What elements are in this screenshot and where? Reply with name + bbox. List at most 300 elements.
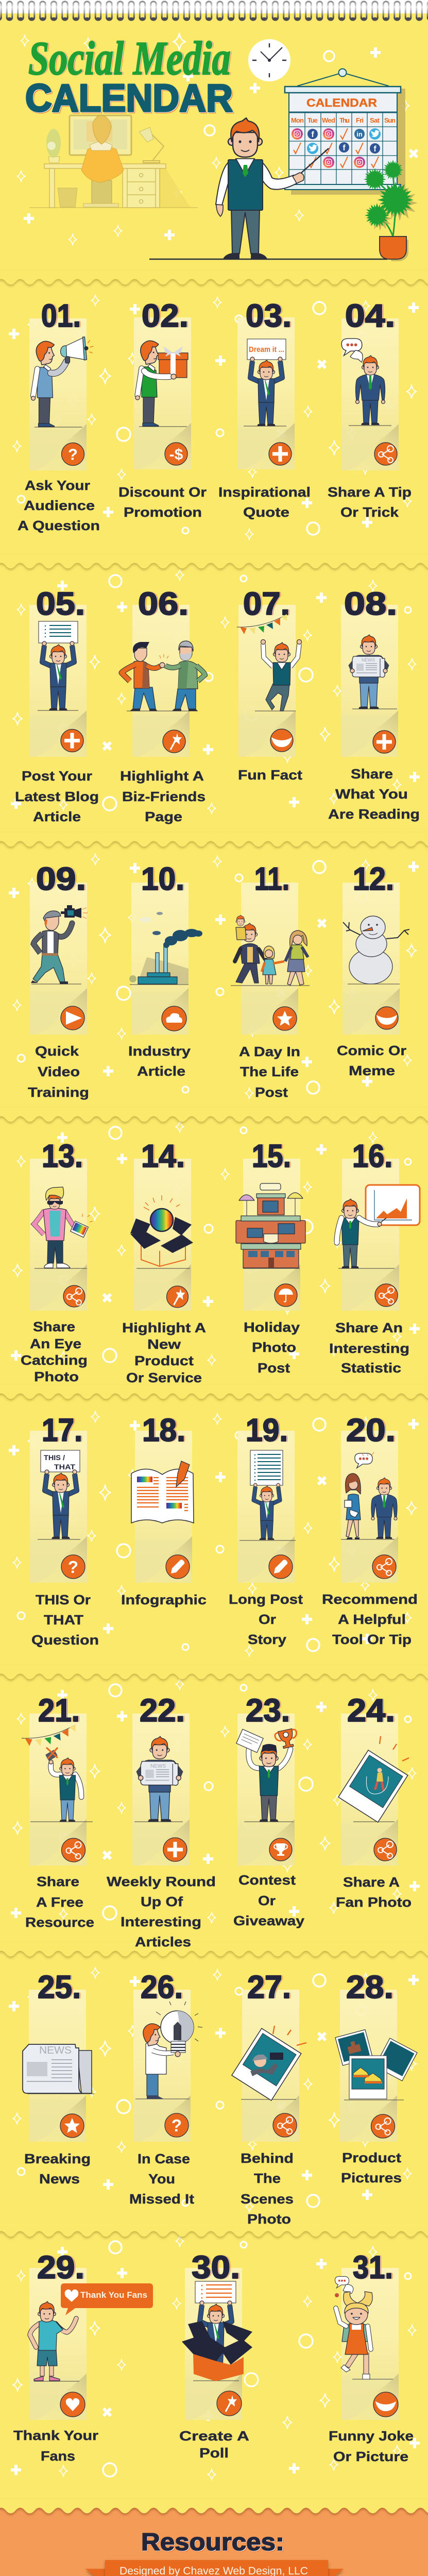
illustration: man with long post sign [239, 1450, 296, 1540]
footer wavy top [0, 2499, 428, 2513]
speech bubble [61, 2283, 153, 2315]
label: Share A [343, 1874, 400, 1890]
item 07 [237, 586, 302, 783]
label [341, 2150, 402, 2185]
icon: pencil [269, 1555, 293, 1579]
illustration: newspaper [23, 2044, 94, 2094]
label [28, 1043, 89, 1100]
item 10 [128, 861, 202, 1079]
note paper [341, 1431, 398, 1583]
label: A Question [18, 518, 100, 533]
title: CALENDAR [25, 76, 233, 120]
calendar heading: CALENDAR [306, 96, 377, 109]
label: Recommend [322, 1591, 418, 1607]
illustration: open box with rainbow ball [130, 1195, 193, 1268]
item 14 [122, 1139, 206, 1385]
illustration: fashion woman with tablet [34, 1187, 93, 1268]
icon: smile [375, 1007, 398, 1029]
number: 13. [42, 1139, 83, 1174]
label: Industry [128, 1043, 191, 1059]
number: 01. [41, 298, 81, 334]
note paper [342, 1159, 399, 1311]
ribbon banner [85, 2560, 344, 2576]
desk scene background illustration [29, 115, 198, 208]
note paper [134, 1159, 191, 1311]
note paper [237, 1431, 295, 1583]
icon: wand [163, 730, 185, 753]
icon: share [374, 1838, 397, 1861]
label [24, 2151, 91, 2187]
note paper [237, 317, 295, 469]
number: 30. [192, 2250, 240, 2285]
footer orange panel [0, 2504, 428, 2576]
label: Share [37, 1874, 79, 1889]
weekday labels: Thu [339, 116, 350, 124]
potted plant [363, 159, 418, 261]
note paper [134, 317, 191, 469]
item 26 [129, 1970, 202, 2207]
label [244, 1319, 300, 1376]
note paper [29, 605, 87, 757]
title [25, 32, 233, 120]
illustration: man reading newspaper [350, 635, 397, 709]
note paper [30, 883, 87, 1035]
label: Share [351, 766, 393, 782]
illustration: open book with pencil [131, 1461, 194, 1523]
label: Latest Blog [15, 789, 99, 804]
label [18, 478, 100, 533]
label [13, 2428, 98, 2464]
illustration: man with newspaper: NEWS [150, 1764, 166, 1769]
note paper [341, 1714, 398, 1866]
number: 03. [246, 298, 292, 334]
item 18 [121, 1413, 207, 1607]
note paper [29, 2268, 87, 2420]
label [15, 768, 99, 824]
item 05 [15, 586, 99, 824]
icon: star [60, 2114, 84, 2138]
number: 26. [141, 1970, 183, 2005]
weekday labels: Tue [307, 116, 318, 124]
note paper [30, 1431, 87, 1583]
illustration: fan photo polaroid [338, 1736, 409, 1822]
label: Thank Your [13, 2428, 98, 2443]
note paper [29, 1990, 86, 2142]
note paper [133, 1990, 191, 2142]
weekday labels: Fri [356, 116, 364, 124]
note paper [29, 1714, 87, 1866]
item 29 [13, 2250, 153, 2464]
label: Create A [179, 2428, 249, 2444]
number: 17. [42, 1413, 82, 1448]
calendar marks: f [343, 144, 346, 152]
label: Giveaway [233, 1913, 305, 1928]
icon: wand [217, 2391, 242, 2416]
number: 10. [141, 861, 184, 897]
icon: share [62, 1838, 85, 1862]
number: 09. [36, 861, 86, 897]
label: Article [33, 809, 81, 824]
note paper [341, 605, 398, 757]
number: 31. [353, 2250, 393, 2285]
item 22 [107, 1693, 216, 1950]
icon: smile [373, 2392, 398, 2417]
label: Missed It [129, 2191, 194, 2207]
label [128, 1043, 191, 1079]
label [122, 1320, 206, 1385]
label: Highlight A [122, 1320, 206, 1335]
illustration: cameraman [31, 905, 88, 984]
item 06 [120, 586, 206, 824]
label: What You [335, 786, 408, 802]
item 19 [229, 1413, 303, 1647]
illustration: man with certificate and trophy [236, 1728, 299, 1822]
clock [248, 39, 290, 81]
number: 02. [142, 298, 189, 334]
label: Training [28, 1084, 89, 1100]
number: 21. [38, 1693, 80, 1728]
label: THIS Or [36, 1592, 91, 1607]
number: 04. [345, 298, 395, 334]
number: 14. [141, 1139, 185, 1174]
icon: plus [373, 731, 396, 753]
number: 19. [246, 1413, 288, 1448]
label [233, 1872, 305, 1928]
label: Fan Photo [336, 1894, 412, 1910]
label: Question [31, 1632, 99, 1648]
label: Story [248, 1632, 287, 1647]
icon: share [374, 443, 397, 465]
number: 24. [347, 1693, 395, 1728]
note paper [341, 2268, 399, 2420]
item 30 [179, 2250, 252, 2461]
item 15 [236, 1139, 305, 1376]
label: A Free [36, 1894, 83, 1910]
icon: pencil [166, 1555, 190, 1579]
label: Post [255, 1084, 288, 1100]
illustration: man with megaphone [31, 337, 94, 427]
icon: umbrella [275, 1284, 297, 1307]
wavy dividers [0, 270, 428, 2237]
label: Holiday [244, 1319, 300, 1335]
label: Highlight A [120, 768, 204, 784]
illustration: man holding free resource with bunting [22, 1724, 93, 1822]
label: Audience [24, 498, 95, 513]
icon: share [372, 1555, 396, 1579]
item 17 [30, 1413, 99, 1648]
icon: plus [269, 443, 292, 465]
illustration: behind the scenes polaroid [232, 2026, 306, 2100]
item 11 [231, 861, 310, 1100]
label [328, 484, 412, 520]
label: The [254, 2171, 281, 2186]
label: Inspirational [218, 484, 311, 500]
illustration: suited man with speech bubbles [341, 338, 391, 426]
label [107, 1874, 216, 1950]
number: 15. [252, 1139, 291, 1174]
label [336, 1874, 412, 1910]
illustration: man with newspaper [134, 1736, 183, 1822]
label: Articles [135, 1934, 191, 1950]
label [25, 1874, 94, 1930]
item 21 [22, 1693, 94, 1930]
icon: cloud [162, 1006, 186, 1031]
note paper [343, 883, 400, 1035]
label [329, 2428, 414, 2464]
illustration: man with light bulb [135, 2002, 202, 2099]
weekday labels: Wed [322, 116, 335, 124]
label: Are Reading [328, 806, 420, 822]
label: Share A Tip [328, 484, 412, 500]
label [129, 2151, 194, 2207]
illustration: family walking [231, 915, 310, 986]
label: Product [134, 1353, 194, 1368]
label: Product [342, 2150, 401, 2165]
note paper [340, 1990, 397, 2142]
icon: question [61, 1555, 85, 1579]
illustration: product photos [335, 2029, 417, 2100]
label: Behind [241, 2150, 294, 2166]
number: 12. [353, 861, 394, 897]
icon: question [165, 2113, 189, 2137]
label: Photo [247, 2211, 291, 2227]
icon: smile [270, 729, 293, 752]
label: Photo [252, 1340, 296, 1355]
note paper [132, 1714, 190, 1866]
icon: trophy [269, 1838, 292, 1861]
calendar marks [292, 128, 381, 168]
label: Article [137, 1063, 185, 1079]
label: Tool Or Tip [332, 1632, 412, 1647]
weekday labels: Mon [291, 116, 304, 124]
item 04 [328, 298, 412, 520]
label: An Eye [30, 1336, 81, 1351]
icon: plus [61, 730, 83, 752]
footer heading: resources: Resources: [141, 2528, 284, 2555]
label: In Case [138, 2151, 190, 2166]
note paper [237, 1714, 295, 1866]
icon: question: ? [68, 445, 78, 464]
item 12 [337, 861, 409, 1078]
calendar marks: f [373, 145, 376, 154]
label: Photo [34, 1369, 79, 1384]
label: Or [258, 1893, 276, 1908]
number: 27. [247, 1970, 291, 2005]
label [329, 1320, 409, 1376]
item 01 [18, 298, 100, 533]
item 27 [232, 1970, 306, 2227]
number: 16. [352, 1139, 392, 1174]
note paper [29, 318, 87, 470]
icon: share [371, 2114, 395, 2138]
teacher character [216, 118, 329, 259]
ground line [149, 259, 387, 260]
label [239, 1044, 300, 1100]
label: Biz-Friends [122, 789, 206, 804]
label: Or Service [126, 1370, 202, 1385]
note paper [238, 605, 296, 757]
icon: share [375, 1284, 398, 1307]
label: Catching [21, 1352, 88, 1368]
label: Up Of [141, 1894, 183, 1909]
label [21, 1319, 88, 1384]
item 09 [28, 861, 89, 1100]
icon: discount [165, 443, 187, 465]
label: Quick [35, 1043, 79, 1059]
number: 08. [344, 586, 397, 622]
label: Post [258, 1360, 290, 1376]
icon: share [273, 2113, 297, 2137]
wall calendar [285, 69, 405, 195]
illustration: newspaper: NEWS [39, 2045, 72, 2056]
icon: question: ? [68, 1557, 78, 1577]
label: Pictures [341, 2170, 402, 2185]
illustration: man with quote sign [244, 339, 286, 426]
number: 28. [346, 1970, 393, 2005]
number: 20. [346, 1413, 396, 1448]
item 28 [335, 1970, 417, 2185]
item 20 [322, 1413, 418, 1647]
label: Infographic [121, 1592, 207, 1607]
label [120, 768, 206, 824]
illustration: woman and man with speech bubble [341, 1452, 397, 1539]
label: Interesting [329, 1341, 409, 1356]
label: Promotion [124, 504, 202, 520]
number: 06. [138, 586, 189, 622]
icon: wand [167, 1286, 189, 1308]
label [337, 1043, 406, 1078]
label: Poll [199, 2445, 229, 2461]
calendar marks: f [311, 130, 314, 139]
label [179, 2428, 249, 2461]
item 03 [218, 298, 311, 520]
number: 05. [36, 586, 85, 622]
label: Share An [335, 1320, 403, 1335]
label [31, 1592, 99, 1648]
number: 29. [37, 2250, 84, 2285]
label: A Day In [239, 1044, 300, 1059]
label: Contest [238, 1872, 296, 1888]
label [218, 484, 311, 520]
icon: question [62, 443, 84, 466]
note paper [132, 605, 190, 757]
icon: share [63, 1285, 85, 1307]
illustration: man with this or that sign: THAT [54, 1463, 75, 1471]
illustration: man reading newspaper: NEWS [362, 657, 375, 663]
icon: plus [163, 1838, 187, 1861]
label: Breaking [24, 2151, 91, 2166]
spiral binding [0, 0, 428, 23]
note paper [185, 2268, 242, 2420]
icon: question: ? [172, 2116, 182, 2135]
item 31 [329, 2250, 414, 2464]
illustration: man with this or that sign: THIS / [44, 1453, 65, 1462]
item 16 [329, 1139, 420, 1376]
number: 11. [254, 861, 289, 897]
weekday labels [291, 116, 396, 124]
item 02 [118, 298, 207, 520]
item 13 [21, 1139, 93, 1384]
illustration: man presenting chart [337, 1185, 420, 1268]
note paper [243, 1159, 300, 1311]
note paper [131, 883, 189, 1035]
weekday labels: Sun [384, 116, 396, 124]
label: Comic Or [337, 1043, 406, 1058]
item 23 [233, 1693, 305, 1928]
icon: discount: -$ [169, 446, 183, 463]
label: Resource [25, 1914, 94, 1930]
icon: play [61, 1006, 84, 1030]
label: News [39, 2171, 80, 2187]
title: Social Media [28, 32, 231, 84]
illustration: two friends fist bump [122, 641, 205, 711]
label: Video [38, 1064, 80, 1079]
number: 18. [142, 1413, 185, 1448]
number: 07. [243, 586, 290, 622]
number: 23. [246, 1693, 290, 1728]
label: Or Picture [333, 2449, 408, 2464]
label: Or [259, 1612, 276, 1627]
illustration: dancing man with bunting [237, 614, 302, 711]
note paper [241, 883, 298, 1035]
note paper [242, 1990, 299, 2142]
label: Weekly Round [107, 1874, 216, 1889]
label: Fun Fact [238, 767, 302, 783]
label [229, 1591, 303, 1647]
label: A Helpful [338, 1612, 406, 1627]
icon: heart [60, 2392, 85, 2417]
illustration: man with gift [135, 341, 188, 427]
label: You [148, 2171, 175, 2187]
note paper [135, 1431, 192, 1583]
label [322, 1591, 418, 1647]
label: THAT [44, 1612, 83, 1628]
label: Discount Or [118, 484, 207, 500]
label: New [147, 1336, 181, 1352]
item 25 [23, 1970, 94, 2187]
label: Interesting [121, 1914, 201, 1929]
speech bubble: Thank You Fans [80, 2290, 147, 2300]
illustration: man with blog sign [38, 621, 78, 710]
label: Meme [349, 1063, 395, 1078]
item 24 [336, 1693, 412, 1910]
label: The Life [240, 1064, 299, 1079]
illustration: boy waving with speech bubble [30, 2283, 153, 2381]
label: Funny Joke [329, 2428, 414, 2444]
label: Page [145, 809, 182, 824]
label: Quote [243, 504, 289, 520]
illustration: factory with smoke [129, 912, 202, 985]
weekday labels: Sat [370, 116, 380, 124]
label [241, 2150, 294, 2227]
icon: star [273, 1007, 297, 1030]
illustration: holiday building [236, 1183, 305, 1268]
label: Post Your [22, 768, 92, 784]
illustration: snowman [343, 916, 409, 984]
label: Statistic [341, 1360, 401, 1376]
illustration: man in box with poll [182, 2281, 252, 2381]
calendar marks: in [356, 130, 363, 138]
label [328, 766, 420, 822]
label: Ask Your [25, 478, 90, 493]
illustration: girl waving [335, 2276, 393, 2379]
number: 22. [140, 1693, 185, 1728]
label: Long Post [229, 1591, 303, 1607]
label [118, 484, 207, 520]
note paper [30, 1159, 87, 1311]
label: Scenes [241, 2191, 294, 2207]
illustration: man with this or that sign [38, 1450, 80, 1539]
